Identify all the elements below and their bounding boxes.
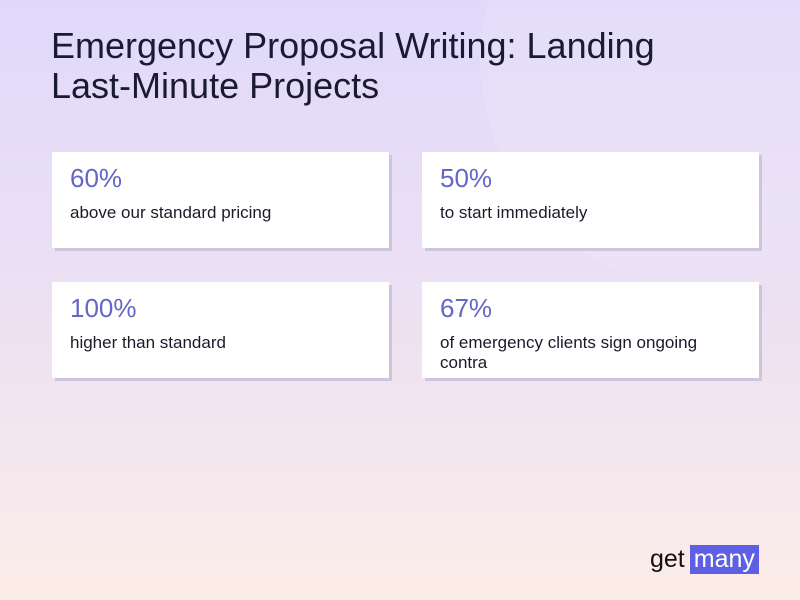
card: 67%: of emergency clients sign ongoing contra — [440, 333, 697, 372]
card: 60% — [52, 152, 389, 248]
card: 60%: 60% — [70, 163, 122, 193]
card: 100%: higher than standard — [70, 333, 226, 352]
logo: get — [650, 545, 685, 573]
card: 60%: above our standard pricing — [70, 203, 271, 222]
card: 100%: 100% — [70, 293, 136, 323]
logo: many — [694, 545, 755, 573]
logo — [650, 545, 759, 574]
title: Emergency Proposal Writing: Landing Last-Minute Projects — [51, 25, 655, 106]
card: 50%: 50% — [440, 163, 492, 193]
card: 50% — [422, 152, 759, 248]
card: 67%: 67% — [440, 293, 492, 323]
card: 50%: to start immediately — [440, 203, 587, 222]
card: 100% — [52, 282, 389, 378]
card: 67% — [422, 282, 759, 378]
